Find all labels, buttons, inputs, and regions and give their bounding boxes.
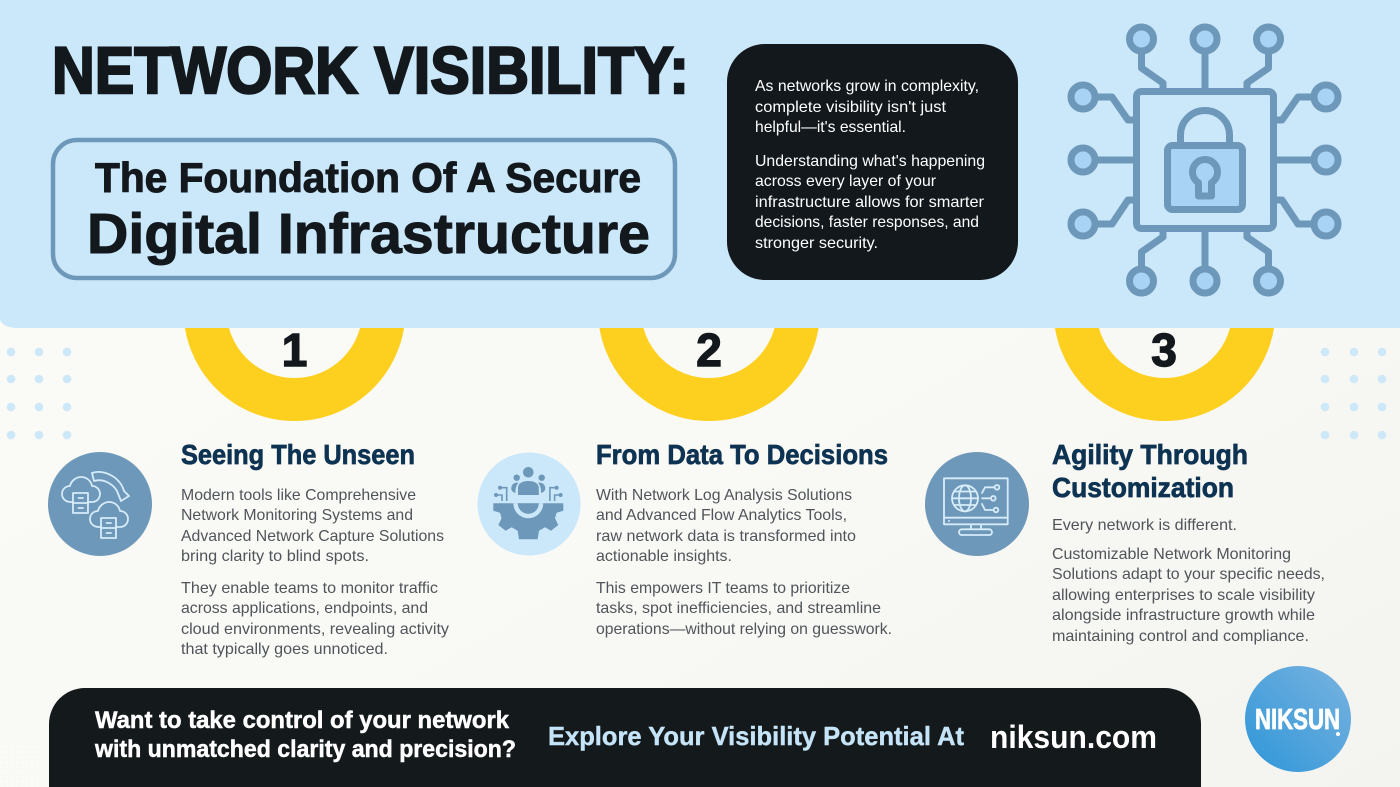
call to action bar: Want to take control of your network — [95, 707, 510, 734]
call to action bar — [49, 688, 1201, 787]
heading and text: from data to decisions: This empowers IT teams to prioritize — [596, 580, 850, 597]
heading and text: agility through customization: Customization — [1052, 472, 1234, 503]
call to action bar: Explore Your Visibility Potential At — [548, 721, 964, 751]
icon: circuit padlock — [1071, 27, 1338, 293]
heading and text: agility through customization: allowing enterprises to scale visibility — [1052, 587, 1315, 604]
heading and text: agility through customization: Customizable Network Monitoring — [1052, 546, 1291, 563]
intro panel: decisions, faster responses, and — [755, 214, 979, 231]
heading and text: seeing the unseen — [181, 439, 449, 658]
dot pattern: right — [1321, 348, 1386, 439]
heading and text: seeing the unseen: Modern tools like Comprehensive — [181, 487, 416, 504]
heading and text: seeing the unseen: Advanced Network Capture Solutions — [181, 528, 444, 545]
subtitle box — [53, 140, 675, 278]
number ring 2 — [620, 220, 798, 400]
heading and text: from data to decisions: and Advanced Flow Analytics Tools, — [596, 507, 847, 524]
number ring 3 — [1075, 220, 1254, 400]
heading and text: seeing the unseen: across applications, endpoints, and — [181, 600, 428, 617]
heading and text: seeing the unseen: that typically goes unnoticed. — [181, 641, 388, 658]
heading and text: from data to decisions: From Data To Decisions — [596, 439, 888, 470]
title: NETWORK VISIBILITY: — [52, 33, 689, 107]
call to action bar: niksun.com — [990, 719, 1157, 755]
dot pattern: left — [7, 348, 71, 439]
intro panel: helpful—it's essential. — [755, 119, 906, 136]
icon: monitor with globe — [925, 452, 1029, 556]
icon: clouds and files — [48, 452, 152, 556]
intro panel: complete visibility isn't just — [755, 99, 947, 116]
heading and text: from data to decisions: actionable insights. — [596, 548, 732, 565]
number ring 1: 1 — [282, 324, 307, 376]
intro panel: infrastructure allows for smarter — [755, 194, 984, 211]
heading and text: seeing the unseen: cloud environments, revealing activity — [181, 621, 449, 638]
subtitle box: Digital Infrastructure — [87, 202, 650, 266]
heading and text: agility through customization: Every network is different. — [1052, 517, 1237, 534]
heading and text: from data to decisions: raw network data is transformed into — [596, 528, 856, 545]
intro panel: stronger security. — [755, 235, 878, 252]
heading and text: agility through customization: Agility Through — [1052, 439, 1248, 470]
number ring 1 — [205, 220, 384, 400]
logo: niksun: NIKSUN — [1255, 704, 1340, 736]
heading and text: seeing the unseen: bring clarity to blind spots. — [181, 548, 369, 565]
logo: niksun — [1245, 666, 1351, 772]
heading and text: agility through customization — [1052, 439, 1325, 645]
heading and text: from data to decisions: operations—without relying on guesswork. — [596, 621, 892, 638]
intro panel: across every layer of your — [755, 173, 936, 190]
heading and text: from data to decisions: With Network Log Analysis Solutions — [596, 487, 852, 504]
heading and text: agility through customization: Solutions adapt to your specific needs, — [1052, 566, 1325, 583]
intro panel — [727, 44, 1018, 280]
header banner — [0, 0, 1400, 328]
heading and text: from data to decisions — [596, 439, 892, 638]
heading and text: agility through customization: maintaining control and compliance. — [1052, 628, 1309, 645]
call to action bar: with unmatched clarity and precision? — [94, 736, 516, 763]
subtitle box: The Foundation Of A Secure — [95, 154, 641, 201]
icon: team and gear — [478, 452, 580, 556]
number ring 2: 2 — [696, 324, 722, 376]
heading and text: seeing the unseen: Network Monitoring Systems and — [181, 507, 413, 524]
heading and text: seeing the unseen: They enable teams to monitor traffic — [181, 580, 438, 597]
heading and text: seeing the unseen: Seeing The Unseen — [181, 439, 415, 470]
heading and text: agility through customization: alongside infrastructure growth while — [1052, 607, 1315, 624]
heading and text: from data to decisions: tasks, spot inefficiencies, and streamline — [596, 600, 881, 617]
intro panel: Understanding what's happening — [755, 153, 985, 170]
intro panel: As networks grow in complexity, — [755, 78, 979, 95]
number ring 3: 3 — [1151, 324, 1177, 376]
